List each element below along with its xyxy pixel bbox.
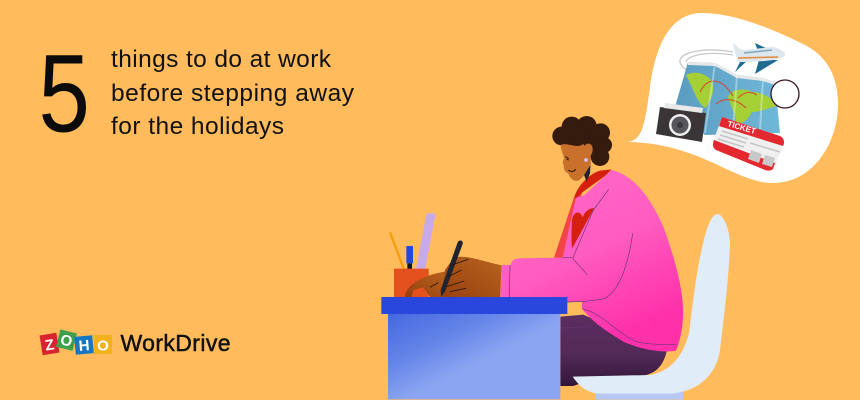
ruler bbox=[416, 213, 436, 269]
eye and smile bbox=[565, 157, 576, 171]
logo tiles bbox=[40, 329, 112, 355]
hair bbox=[552, 116, 612, 166]
sweater heart bbox=[571, 208, 594, 249]
heading text: things to do at work bbox=[111, 46, 332, 73]
logo wordmark: WorkDrive bbox=[120, 330, 230, 356]
logo tiles: Z bbox=[44, 336, 56, 355]
pen holder bbox=[394, 269, 429, 297]
pants bbox=[560, 315, 667, 386]
travel illustration bbox=[656, 43, 799, 171]
logo: Zoho WorkDrive bbox=[40, 329, 230, 356]
icon: airplane contrail bbox=[680, 50, 733, 72]
icon: travel ticket: TICKET bbox=[726, 119, 757, 136]
icon: airplane bbox=[733, 43, 785, 74]
earring bbox=[584, 158, 588, 162]
pencil bbox=[390, 232, 404, 269]
icon: travel ticket bbox=[713, 117, 784, 171]
pen bbox=[441, 240, 463, 297]
illustration: person at desk bbox=[381, 116, 730, 400]
heading text: for the holidays bbox=[111, 113, 284, 140]
ear bbox=[583, 144, 593, 158]
right hand bbox=[442, 257, 502, 297]
sweater seams bbox=[509, 189, 676, 345]
icon: folded world map bbox=[675, 62, 780, 135]
left hand bbox=[405, 271, 450, 297]
logo tiles: O bbox=[59, 331, 74, 351]
logo tiles: O bbox=[97, 338, 109, 354]
finger lines bbox=[430, 259, 468, 292]
desk top bbox=[381, 297, 567, 314]
icon: globe circle bbox=[771, 80, 799, 108]
speech bubble bbox=[628, 13, 838, 183]
face bbox=[561, 144, 591, 181]
numeral 5: 5 bbox=[38, 32, 90, 155]
collar bbox=[574, 169, 612, 199]
sweater bbox=[500, 170, 683, 351]
neck bbox=[583, 163, 591, 182]
chair base bbox=[596, 392, 683, 400]
logo tiles: H bbox=[78, 337, 90, 355]
icon: camera bbox=[656, 103, 706, 142]
heading text: before stepping away bbox=[111, 80, 355, 107]
marker bbox=[406, 246, 413, 269]
red under shirt bbox=[554, 187, 583, 258]
heading text bbox=[111, 46, 355, 140]
chair bbox=[573, 214, 730, 394]
desk body bbox=[388, 314, 560, 399]
